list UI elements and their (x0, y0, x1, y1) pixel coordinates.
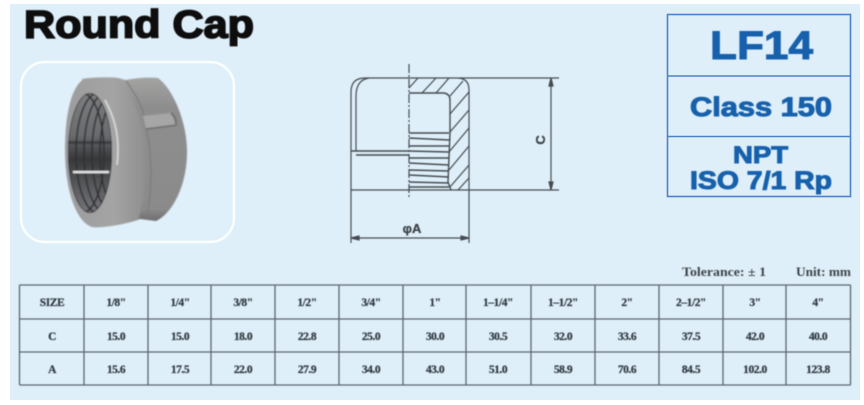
row C: 15.0 (171, 331, 190, 343)
threads (409, 133, 449, 187)
icon: round cap fitting photo (60, 77, 187, 227)
row C: 25.0 (362, 331, 381, 343)
row A: 43.0 (426, 364, 445, 376)
unit note: Unit: mm (796, 264, 851, 279)
row C: 40.0 (809, 331, 828, 343)
header row: 1" (429, 297, 441, 309)
header row (40, 297, 824, 309)
spec box (668, 14, 850, 196)
row C: 37.5 (682, 331, 701, 343)
thread standard: NPT: NPT (733, 142, 788, 169)
row C (48, 331, 828, 343)
header row: 1/8" (106, 297, 126, 309)
model code: LF14 (710, 24, 814, 68)
row A: 34.0 (362, 364, 381, 376)
header row: 1–1/4" (483, 297, 513, 309)
row A: 58.9 (554, 364, 573, 376)
fitting rib (143, 113, 177, 129)
header row: 3" (749, 297, 761, 309)
row C: 33.6 (618, 331, 637, 343)
row A: 15.6 (107, 364, 126, 376)
hatching (409, 78, 469, 190)
center line (408, 64, 410, 197)
inner cavity (409, 93, 451, 190)
dimension label: phi A: φA (403, 221, 422, 236)
row A: A (48, 364, 57, 376)
row C: 15.0 (107, 331, 126, 343)
pressure class: Class 150 (690, 92, 832, 122)
dimension label: C: C (533, 135, 548, 145)
extension lines (351, 78, 559, 243)
technical drawing: section view (351, 64, 559, 243)
header row: 1–1/2" (548, 297, 578, 309)
outline (351, 78, 469, 190)
thread standard: ISO: ISO 7/1 Rp (690, 167, 832, 195)
header row: 2" (621, 297, 633, 309)
row C: C (48, 331, 56, 343)
row A: 102.0 (743, 364, 768, 376)
header row: 3/4" (361, 297, 381, 309)
photo frame (21, 62, 234, 242)
header row: 1/4" (170, 297, 190, 309)
tolerance note: Tolerance: ± 1 (682, 264, 766, 279)
row A: 17.5 (171, 364, 190, 376)
title: Round Cap (24, 4, 254, 46)
row A (48, 364, 831, 376)
row C: 30.0 (426, 331, 445, 343)
row A: 27.9 (298, 364, 317, 376)
row C: 30.5 (489, 331, 508, 343)
table grid (20, 285, 850, 385)
row C: 42.0 (746, 331, 765, 343)
row A: 51.0 (489, 364, 508, 376)
row C: 18.0 (234, 331, 253, 343)
header row: 1/2" (297, 297, 317, 309)
panel: product photo (21, 62, 234, 242)
row A: 123.8 (806, 364, 831, 376)
header row: 2–1/2" (676, 297, 706, 309)
dimension lines (351, 78, 551, 238)
size table (20, 285, 850, 385)
header row: SIZE (40, 297, 65, 309)
fitting bore (68, 93, 112, 213)
row A: 70.6 (618, 364, 637, 376)
header row: 3/8" (233, 297, 253, 309)
row A: 84.5 (682, 364, 701, 376)
row C: 32.0 (554, 331, 573, 343)
row C: 22.8 (298, 331, 317, 343)
row A: 22.0 (234, 364, 253, 376)
header row: 4" (812, 297, 824, 309)
